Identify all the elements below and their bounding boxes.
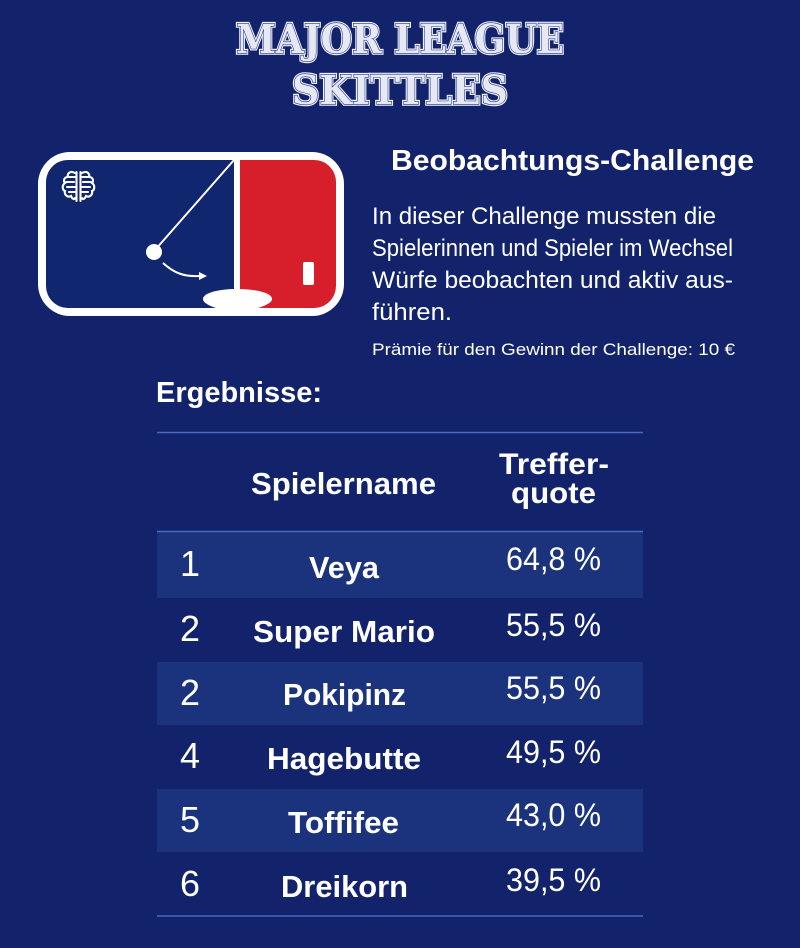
- row: Veya: Veya: [309, 550, 380, 585]
- row: Pokipinz: [180, 670, 601, 713]
- skittle pin: [303, 262, 314, 285]
- heading: challenge name: Beobachtungs-Challenge: [391, 145, 754, 177]
- row: Veya: 1: [180, 543, 200, 584]
- row: Dreikorn: 6: [180, 863, 200, 904]
- description text: führen.: [372, 299, 452, 326]
- row: Hagebutte: 49,5 %: [506, 734, 601, 770]
- title: MAJOR LEAGUE: [236, 16, 564, 63]
- icon: brain: [63, 172, 94, 201]
- row: Dreikorn: 39,5 %: [506, 862, 601, 898]
- row: Pokipinz: Pokipinz: [283, 677, 406, 712]
- row: Hagebutte: [180, 734, 601, 776]
- row: Super Mario: 2: [180, 608, 200, 649]
- table header: Treffer-: [499, 448, 609, 481]
- title: SKITTLES: [292, 67, 508, 114]
- row: Super Mario: 55,5 %: [506, 607, 601, 643]
- row stripes: [157, 532, 643, 852]
- pendulum string and ball: [146, 160, 234, 260]
- row: Super Mario: Super Mario: [253, 614, 435, 649]
- description text: In dieser Challenge mussten die: [372, 203, 716, 230]
- title: MAJOR LEAGUE: [236, 16, 564, 63]
- title: SKITTLES: [292, 67, 508, 114]
- curved arrow: [163, 263, 207, 280]
- row: Dreikorn: [180, 862, 601, 904]
- table header: [251, 448, 609, 510]
- red field: [240, 160, 336, 308]
- description text: [372, 203, 733, 326]
- row: Toffifee: Toffifee: [288, 805, 399, 840]
- heading: results: Ergebnisse:: [156, 377, 322, 409]
- description text: Spielerinnen und Spieler im Wechsel: [372, 235, 733, 262]
- logo: [38, 152, 344, 316]
- table header: Spielername: [251, 466, 436, 501]
- home plate ellipse: [203, 289, 272, 308]
- title: [236, 16, 564, 114]
- row: Toffifee: [180, 797, 601, 840]
- blue field: [46, 160, 234, 308]
- row: Dreikorn: Dreikorn: [281, 869, 408, 904]
- row: Toffifee: 5: [180, 799, 200, 840]
- row: Veya: 64,8 %: [506, 541, 601, 577]
- logo frame: [38, 152, 344, 316]
- row: Super Mario: [180, 607, 601, 649]
- row: Pokipinz: 55,5 %: [506, 670, 601, 706]
- table header: quote: [511, 477, 596, 510]
- row: Veya: [180, 541, 601, 585]
- table rules: [157, 432, 643, 916]
- row: Pokipinz: 2: [180, 672, 200, 713]
- description text: Würfe beobachten und aktiv aus-: [372, 267, 733, 294]
- prize note: Prämie für den Gewinn der Challenge: 10 €: [372, 340, 736, 359]
- row: Toffifee: 43,0 %: [506, 797, 601, 833]
- row: Hagebutte: Hagebutte: [267, 741, 421, 776]
- results table: [157, 432, 643, 916]
- row: Hagebutte: 4: [180, 735, 200, 776]
